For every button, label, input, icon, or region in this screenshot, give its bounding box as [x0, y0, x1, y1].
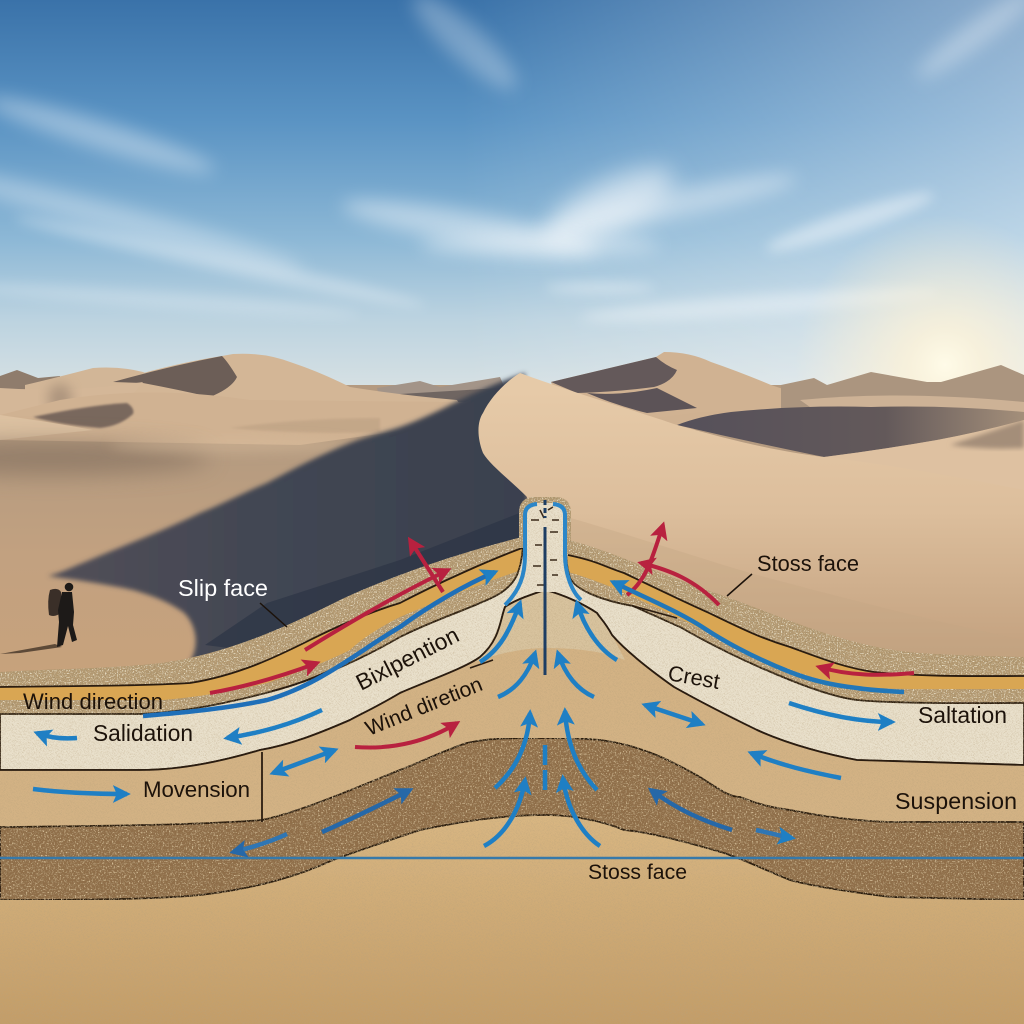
line: vertical fault [261, 752, 263, 822]
label: Slip face: Slip face [178, 575, 268, 601]
label: Crest: Crest [666, 660, 722, 694]
label: Suspension: Suspension [895, 788, 1017, 814]
label: Salidation: Salidation [93, 720, 193, 746]
base horizontal line [0, 857, 1024, 859]
background dune field [0, 352, 1024, 725]
icon: hiker with backpack [0, 583, 77, 654]
blue airflow arrows [33, 572, 904, 852]
label: Bixlpention: Bixlpention [351, 621, 463, 695]
label: Saltation: Saltation [918, 702, 1007, 728]
big dune: lit stoss side [478, 373, 1024, 720]
sky with clouds and sun [0, 0, 1024, 515]
dune cross-section strata [0, 530, 1024, 1024]
label: Stoss face lower: Stoss face [588, 861, 687, 884]
label: Wind diretion: Wind diretion [362, 673, 486, 741]
line: pale band lower edge [0, 590, 1024, 770]
red wind arrows [210, 525, 914, 748]
crest column [505, 497, 581, 675]
big dune: shaded slip side [48, 373, 530, 665]
layer: tan sand [0, 590, 1024, 880]
layer: crest core [475, 590, 625, 662]
layer: brown stratum [0, 738, 1024, 900]
layer: gritty surface [0, 537, 1024, 1024]
line: small contact [272, 606, 677, 691]
layer: orange saltation band [0, 548, 1024, 700]
leader lines [260, 574, 752, 627]
layer: pale sand band [0, 530, 1024, 770]
line: orange band upper edge [0, 548, 1024, 687]
label: Movension: Movension [143, 777, 250, 802]
label: Wind direction: Wind direction [23, 689, 163, 714]
layer: lower floor [0, 800, 1024, 1024]
label: Stoss face upper: Stoss face [757, 551, 859, 576]
